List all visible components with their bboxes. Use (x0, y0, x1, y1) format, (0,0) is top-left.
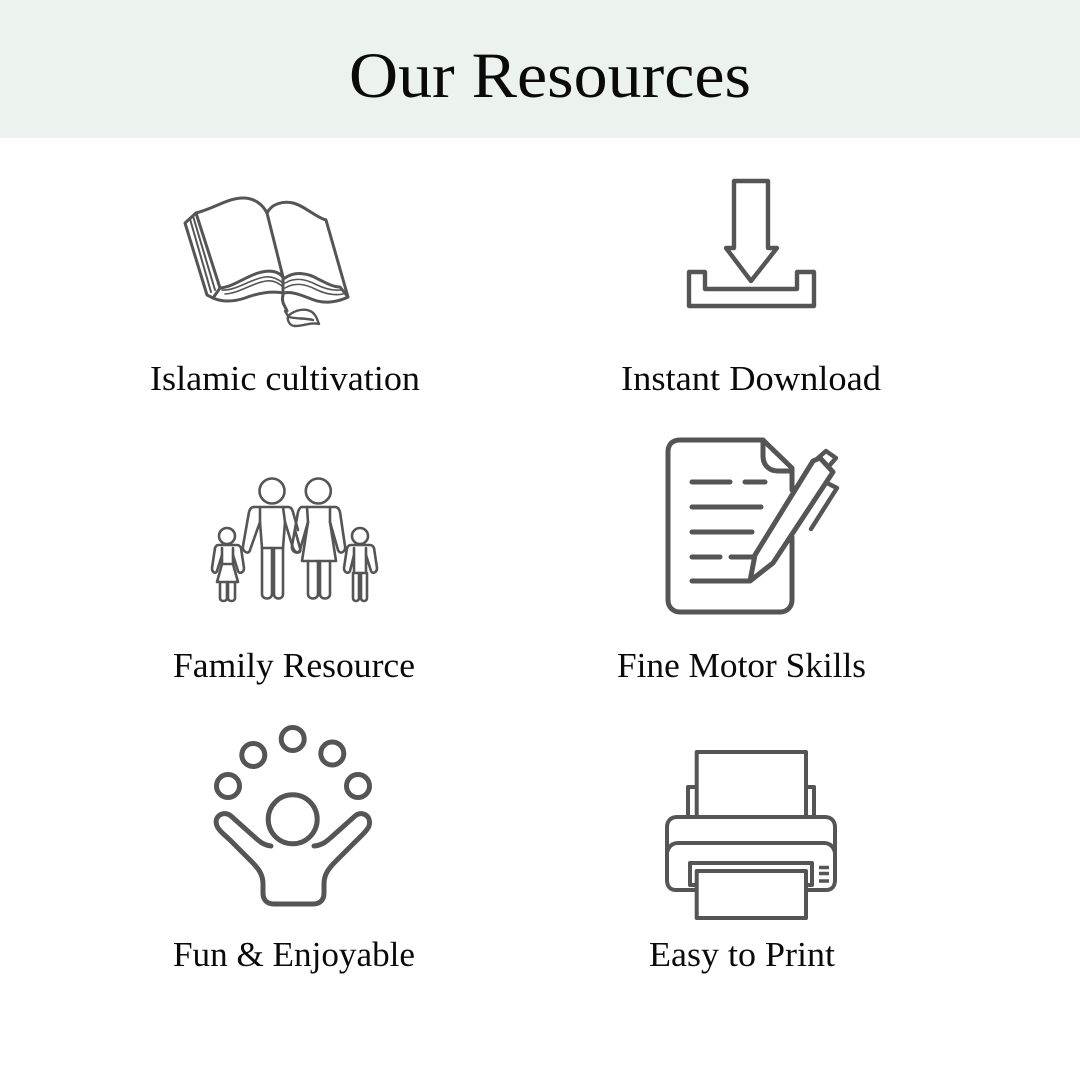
label: Instant Download (621, 359, 882, 398)
header banner (0, 0, 1080, 138)
label: Fun & Enjoyable (173, 935, 415, 974)
icon: juggling person (216, 728, 370, 904)
panel: Fun & Enjoyable (173, 728, 415, 974)
label: Family Resource (173, 646, 415, 685)
title: Our Resources (349, 40, 751, 112)
panel: Instant Download (621, 181, 882, 398)
label: Islamic cultivation (150, 359, 420, 398)
label: Easy to Print (649, 935, 835, 974)
panel: Fine Motor Skills (617, 440, 866, 685)
panel: Family Resource (173, 478, 415, 685)
icon: open book (185, 198, 348, 326)
label: Fine Motor Skills (617, 646, 866, 685)
icon: printer (667, 752, 835, 918)
panel: Easy to Print (649, 752, 835, 974)
icon: family (212, 478, 377, 601)
icon: document and pen (668, 440, 837, 612)
icon: download arrow (689, 181, 814, 306)
panel: Islamic cultivation (150, 198, 420, 398)
